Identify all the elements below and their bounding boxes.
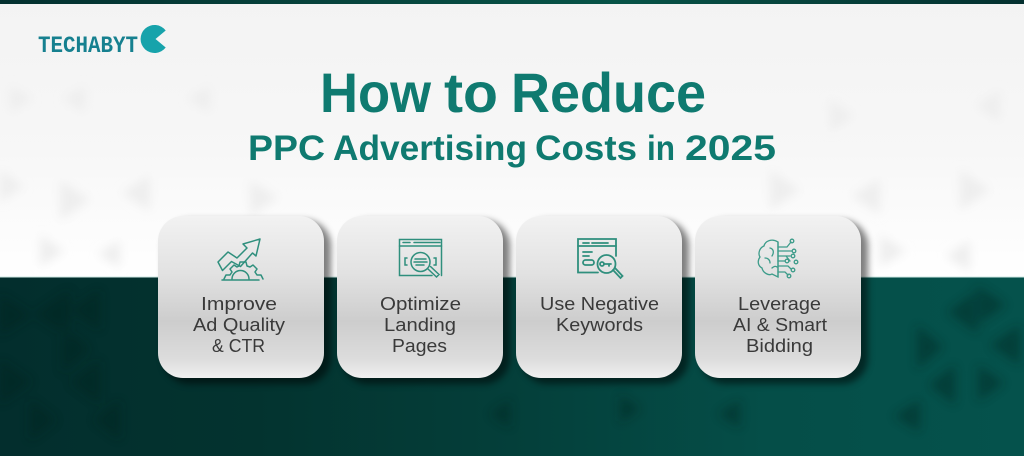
background: dark green lower band [0,276,1024,456]
card 1 label: & CTR [212,335,265,356]
title line 2: Advertising [333,128,527,168]
card 3 label: Use Negative [540,293,659,314]
title line 1: to [444,61,498,124]
card 3: Use Negative Keywords [516,216,689,384]
logo wordmark: TECHABYT [38,33,138,59]
title [248,61,776,168]
card 2: Optimize Landing Pages [337,216,510,384]
title line 2: in [647,128,675,168]
card 2 label: Pages [392,335,447,356]
title line 2 [248,128,776,168]
card 1 label [193,293,286,356]
icon: web page with key magnifier [578,239,622,278]
card 4 label: Leverage [738,293,821,314]
title line 1: Reduce [511,61,706,124]
title line 2: Costs [535,128,637,168]
card 3 label [540,293,659,335]
logo mark: pac-man E [141,25,166,53]
logo: Techabyte [38,25,166,59]
title line 2: PPC [248,128,325,168]
card 4 label: Bidding [746,335,813,356]
title line 1 [320,61,706,124]
card 1: Improve Ad Quality & CTR [158,216,331,384]
card 2 label: Landing [384,314,456,335]
card 1 label: Improve [201,293,277,314]
icon: growth arrow and gear [218,239,263,280]
card 1 label: Ad Quality [193,314,286,335]
card 4 label [733,293,827,356]
card 4: Leverage AI & Smart Bidding [695,216,868,384]
card 2 label: Optimize [380,293,461,314]
card 2 label [380,293,461,356]
card 3 label: Keywords [556,314,643,335]
top accent bar [0,0,1024,4]
background: light upper band [0,0,1024,277]
icon: AI brain circuit [758,239,798,278]
title line 2: 2025 [685,128,776,168]
icon: web page with magnifier [400,240,442,277]
title line 1: How [320,61,431,124]
card 4 label: AI & Smart [733,314,827,335]
